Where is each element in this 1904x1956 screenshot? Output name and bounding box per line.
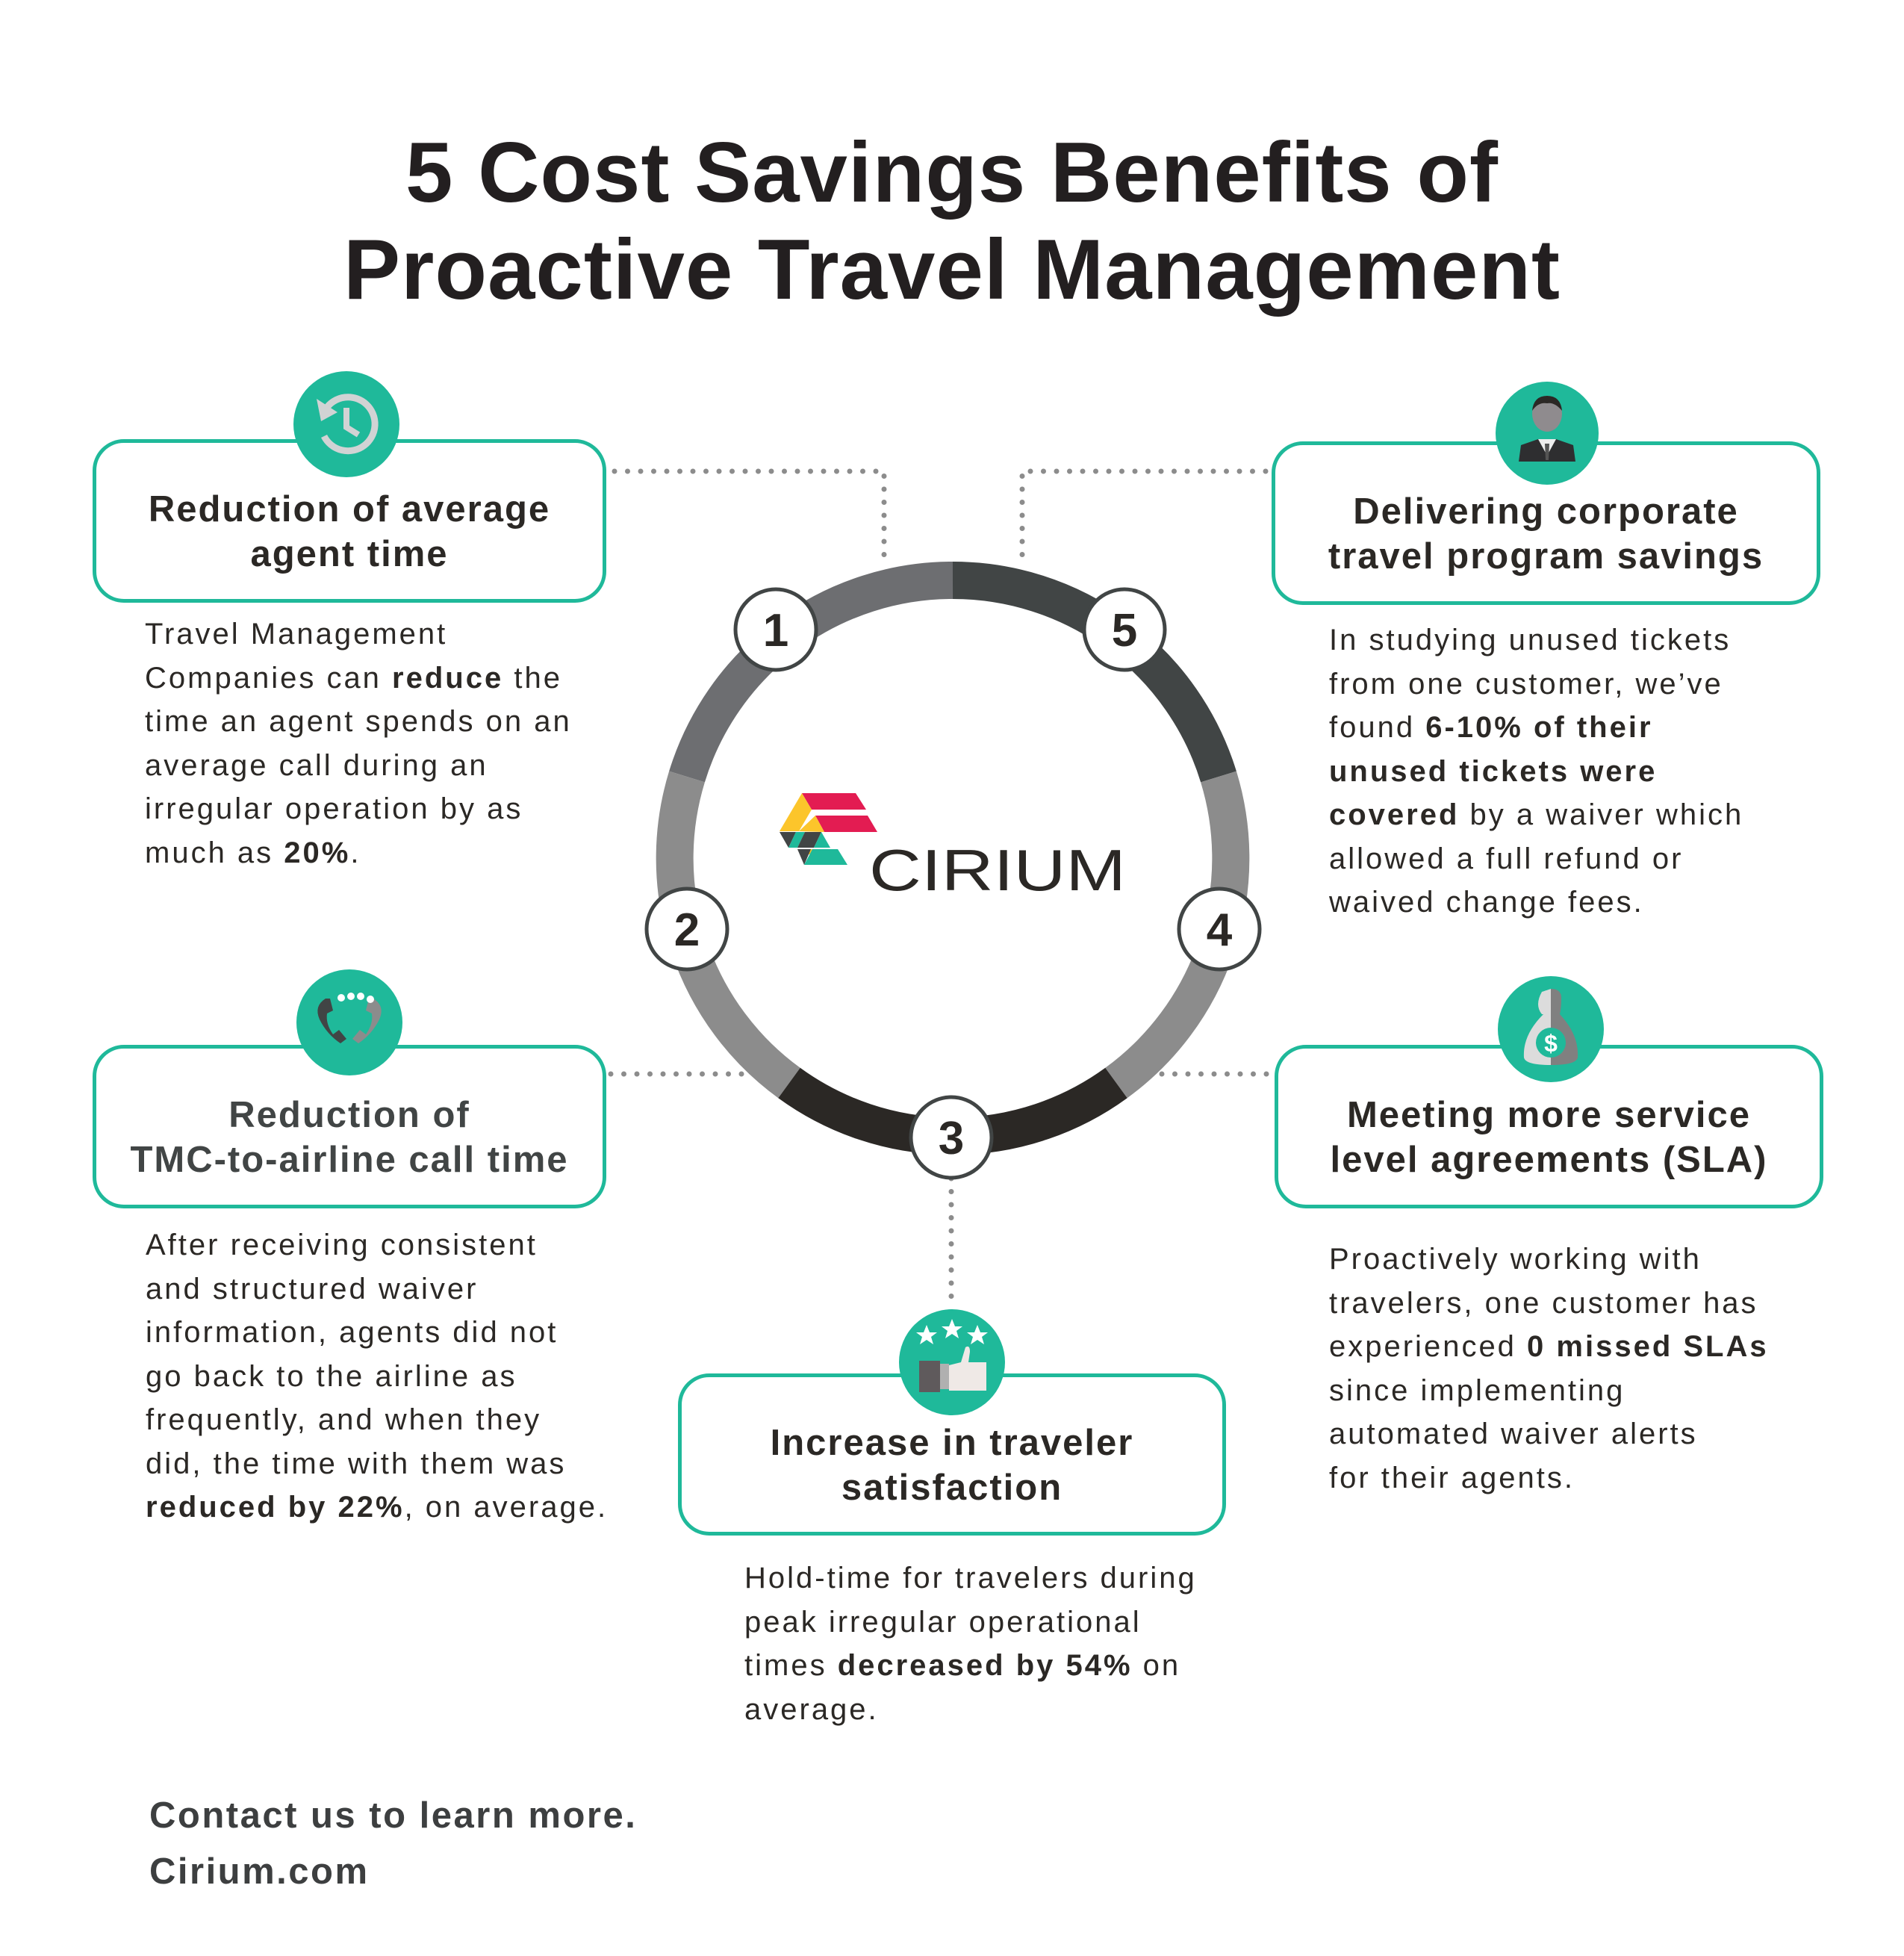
panel 2 box: TMC-to-airline call time xyxy=(130,1140,569,1180)
panel 5 text: waived change fees. xyxy=(1329,886,1644,919)
panel 1 text: irregular operation by as xyxy=(145,792,523,825)
icon: thumbs up stars xyxy=(899,1309,1005,1415)
icon: money bag: $ xyxy=(1544,1030,1558,1057)
icon: clock history xyxy=(293,371,399,477)
number badges: 1 xyxy=(763,605,788,656)
panel 5 text xyxy=(1329,624,1743,919)
panel 1 text: average call during an xyxy=(145,748,488,781)
panel 2 text: did, the time with them was xyxy=(146,1447,566,1480)
panel 2 text: frequently, and when they xyxy=(146,1403,541,1436)
panel 3 box: satisfaction xyxy=(841,1467,1063,1507)
icon: phones xyxy=(296,969,402,1075)
panel 5 box xyxy=(1272,441,1820,605)
title xyxy=(343,125,1561,317)
number badges: 5 xyxy=(1112,605,1137,656)
logo: CIRIUM xyxy=(869,837,1126,903)
panel 2 box: Reduction of xyxy=(228,1095,470,1135)
panel 5 text: covered by a waiver which xyxy=(1329,798,1743,831)
panel 2 text: After receiving consistent xyxy=(146,1229,538,1261)
panel 5 text: unused tickets were xyxy=(1329,754,1657,787)
panel 5 box: Delivering corporate xyxy=(1353,491,1739,532)
panel 3 text xyxy=(744,1562,1197,1725)
panel 1 box: agent time xyxy=(250,533,449,574)
panel 4 text: experienced 0 missed SLAs xyxy=(1329,1330,1769,1363)
ring xyxy=(675,580,1231,1136)
panel 4 text xyxy=(1329,1243,1769,1494)
panel 2 text: reduced by 22%, on average. xyxy=(146,1491,608,1524)
panel 3 text: times decreased by 54% on xyxy=(744,1649,1180,1682)
panel 2 text: information, agents did not xyxy=(146,1316,558,1349)
panel 3 text: Hold-time for travelers during xyxy=(744,1562,1197,1595)
footer: Cirium.com xyxy=(149,1851,370,1892)
panel 2 text xyxy=(146,1229,608,1524)
number badges: 3 xyxy=(939,1113,964,1164)
footer xyxy=(149,1795,637,1892)
panel 5 text: allowed a full refund or xyxy=(1329,842,1683,875)
title: 5 Cost Savings Benefits of xyxy=(405,125,1499,220)
panel 4 text: Proactively working with xyxy=(1329,1243,1702,1276)
panel 2 text: go back to the airline as xyxy=(146,1359,517,1392)
icon: businessman xyxy=(1496,382,1599,485)
panel 4 text: automated waiver alerts xyxy=(1329,1418,1698,1450)
panel 1 text: Travel Management xyxy=(145,618,447,651)
panel 4 box: level agreements (SLA) xyxy=(1331,1140,1767,1180)
panel 1 text: much as 20%. xyxy=(145,836,361,869)
title: Proactive Travel Management xyxy=(343,223,1561,317)
panel 1 box: Reduction of average xyxy=(149,488,550,529)
panel 5 text: from one customer, we’ve xyxy=(1329,668,1723,701)
panel 4 text: for their agents. xyxy=(1329,1461,1575,1494)
number badges: 4 xyxy=(1207,904,1233,956)
panel 5 box: travel program savings xyxy=(1328,536,1764,577)
icon: money bag xyxy=(1498,976,1604,1082)
logo xyxy=(780,793,1126,903)
number badges: 2 xyxy=(674,904,700,956)
panel 1 text: time an agent spends on an xyxy=(145,705,572,738)
panel 3 box xyxy=(678,1373,1226,1536)
panel 5 text: In studying unused tickets xyxy=(1329,624,1731,656)
panel 4 box xyxy=(1275,1045,1823,1208)
panel 3 box: Increase in traveler xyxy=(771,1422,1133,1462)
panel 2 box xyxy=(93,1045,606,1208)
panel 4 text: travelers, one customer has xyxy=(1329,1286,1758,1319)
panel 3 text: average. xyxy=(744,1692,879,1725)
panel 1 box xyxy=(93,439,606,603)
panel 3 text: peak irregular operational xyxy=(744,1606,1142,1639)
panel 1 text xyxy=(145,618,572,869)
panel 2 text: and structured waiver xyxy=(146,1273,478,1305)
panel 4 box: Meeting more service xyxy=(1347,1095,1751,1135)
panel 5 text: found 6-10% of their xyxy=(1329,711,1653,744)
panel 4 text: since implementing xyxy=(1329,1374,1625,1407)
footer: Contact us to learn more. xyxy=(149,1795,637,1836)
panel 1 text: Companies can reduce the xyxy=(145,662,562,695)
